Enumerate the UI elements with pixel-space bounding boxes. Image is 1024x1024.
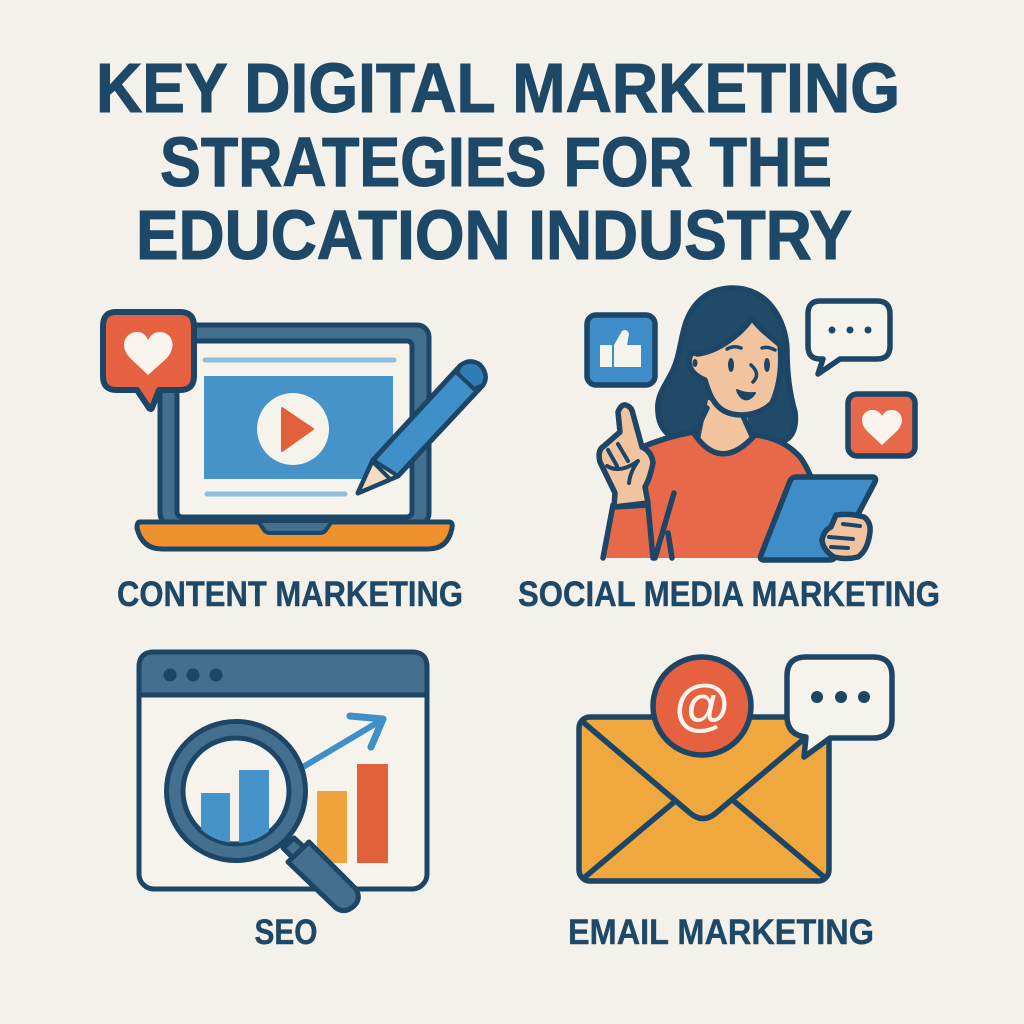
label: social media marketing: SOCIAL MEDIA MARKETING (518, 575, 940, 614)
icon: at sign circle: @ (674, 673, 730, 737)
face (689, 318, 781, 415)
icon: thumbs up badge (587, 315, 655, 385)
raised hand (599, 405, 653, 507)
icon: heart speech badge (103, 312, 194, 409)
icon: heart badge (848, 394, 915, 456)
icon: magnifying glass (166, 722, 358, 911)
icon: speech bubble (787, 657, 892, 757)
label: email marketing: EMAIL MARKETING (568, 913, 874, 952)
icon: envelope (579, 657, 892, 881)
icon: woman with tablet (587, 288, 915, 560)
icon: browser with seo chart (139, 652, 427, 911)
hair (658, 288, 795, 442)
icon: pencil (358, 362, 485, 493)
label: seo: SEO (254, 913, 318, 952)
icon: at sign circle (653, 657, 751, 755)
title: KEY DIGITAL MARKETING (96, 49, 900, 127)
neck (700, 400, 755, 470)
tablet hand (822, 514, 870, 558)
tablet (760, 477, 876, 560)
icon: speech bubble (808, 301, 890, 374)
icon: laptop with video (103, 312, 485, 549)
title: STRATEGIES FOR THE (160, 123, 832, 201)
torso (603, 432, 810, 558)
title (96, 49, 900, 274)
title: EDUCATION INDUSTRY (136, 196, 852, 274)
label: content marketing: CONTENT MARKETING (117, 575, 463, 614)
